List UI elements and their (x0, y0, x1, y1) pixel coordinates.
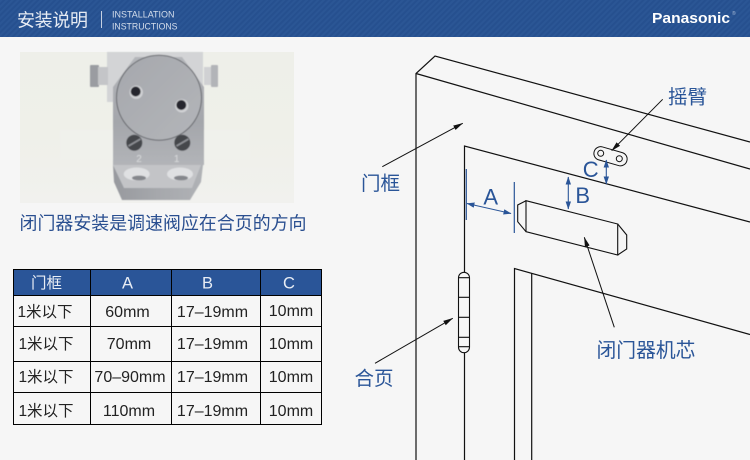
product photo: door closer valve (20, 52, 294, 203)
product photo: door closer valve: 2 (136, 154, 142, 165)
arrow: swing arm (612, 99, 663, 151)
row 3: 10mm (269, 369, 313, 386)
arrow: door frame (382, 123, 463, 167)
photo caption: 闭门器安装是调速阀应在合页的方向 (20, 214, 306, 234)
label: hinge: 合页 (354, 368, 394, 390)
english subtitle: INSTRUCTIONS (112, 22, 178, 32)
title: 安装说明 (17, 10, 88, 30)
table header row: A (122, 274, 133, 292)
row 4: 110mm (103, 403, 155, 420)
row 4: 10mm (269, 403, 313, 420)
row 2: 1米以下 (18, 335, 74, 353)
row 2 (18, 335, 313, 353)
specification table (14, 270, 322, 424)
label: closer body: 闭门器机芯 (596, 340, 695, 362)
table header row: 门框 (31, 274, 62, 292)
row 1: 60mm (105, 304, 150, 321)
label: door frame: 门框 (361, 173, 400, 195)
dimension C: C (583, 157, 599, 182)
hinge (458, 272, 470, 353)
row 2: 70mm (107, 336, 151, 353)
door frame outline (416, 56, 750, 460)
label: swing arm: 摇臂 (668, 87, 707, 109)
arrow: hinge (375, 318, 453, 363)
english subtitle (112, 10, 178, 32)
table header row (14, 270, 322, 296)
installation diagram (354, 56, 750, 460)
row 1: 17–19mm (177, 304, 248, 321)
english subtitle: INSTALLATION (112, 10, 174, 20)
swing arm (592, 145, 629, 167)
logo: Panasonic: ® (732, 10, 736, 17)
product photo: door closer valve: 1 (174, 154, 180, 165)
row 1 (17, 303, 313, 321)
row 2: 17–19mm (177, 336, 248, 353)
arrow: closer body (584, 237, 614, 327)
dimension A: A (483, 184, 498, 210)
row 3: 1米以下 (18, 368, 74, 386)
row 2: 10mm (269, 336, 313, 353)
table grid (14, 270, 322, 424)
dimension B (568, 177, 590, 209)
row 1: 10mm (269, 303, 313, 320)
row 1: 1米以下 (17, 303, 73, 321)
logo: Panasonic: Panasonic (652, 10, 730, 27)
row 4: 1米以下 (18, 402, 74, 420)
table header row: B (202, 274, 213, 292)
dimension C (583, 157, 606, 184)
door closer body (518, 201, 627, 255)
dimension B: B (575, 183, 590, 208)
row 3 (18, 368, 313, 386)
row 3: 17–19mm (177, 369, 248, 386)
dimension A (466, 169, 514, 233)
row 3: 70–90mm (94, 369, 166, 386)
table header row: C (283, 274, 295, 292)
row 4 (18, 402, 313, 420)
row 4: 17–19mm (177, 403, 248, 420)
header bar (0, 0, 750, 37)
